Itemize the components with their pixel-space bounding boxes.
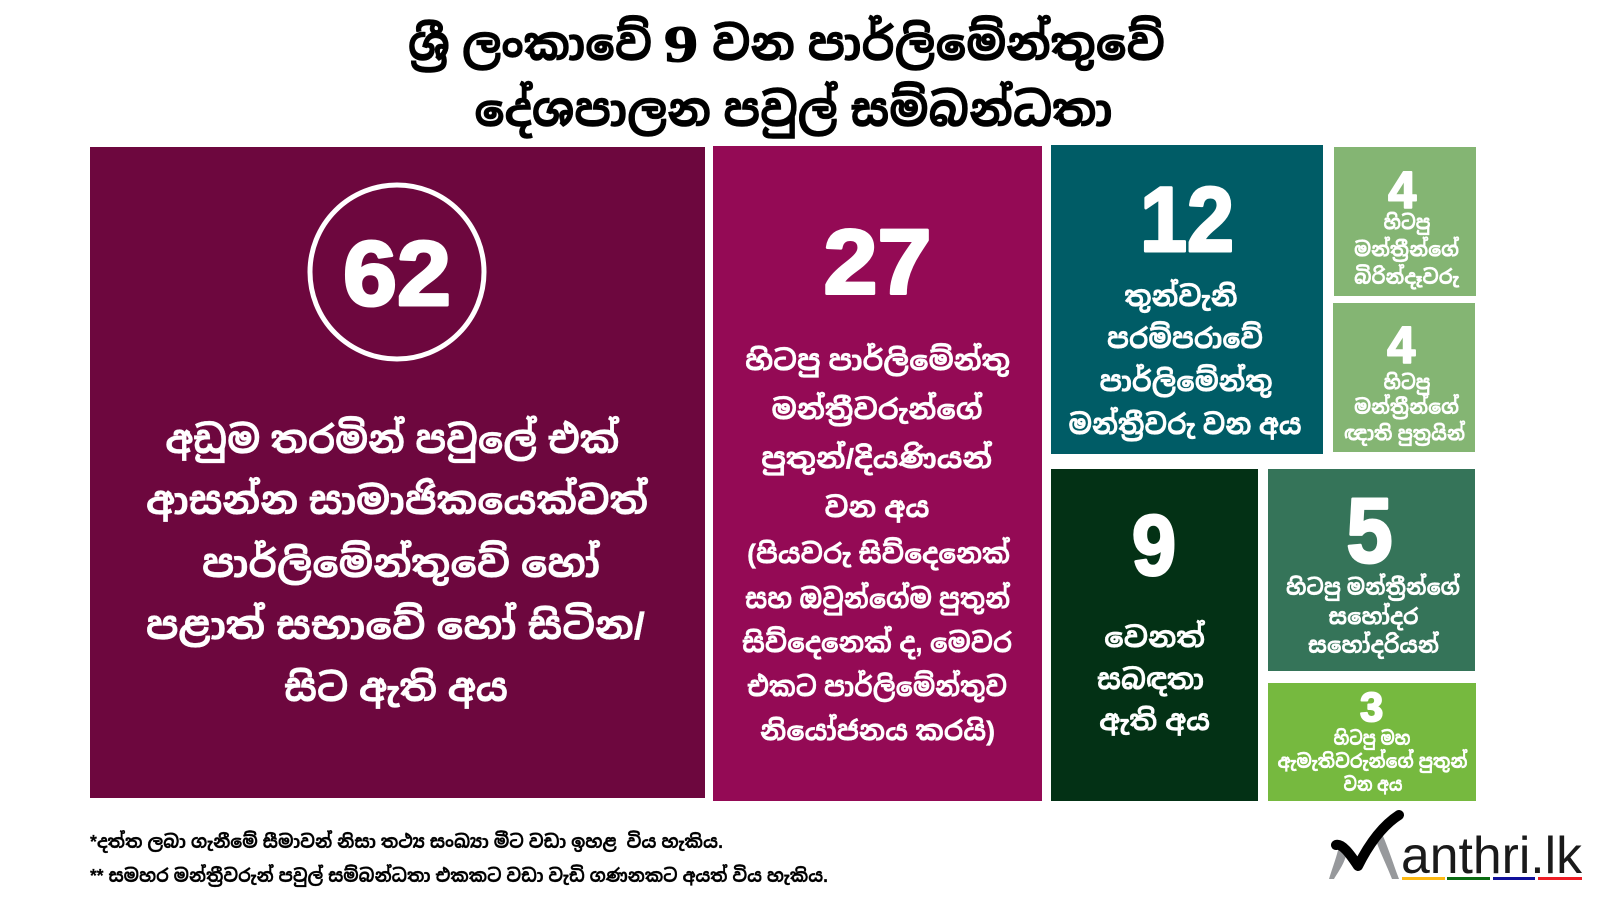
number: 62: 62 (343, 223, 451, 325)
title: වන පාර්ලිමේන්තුවේ (712, 14, 1165, 71)
text block: nephews description: ඥාති පුත්‍රයින් (1344, 420, 1466, 446)
panel: 4 wives of former ministers (1334, 147, 1476, 296)
text block: nephews description (1344, 372, 1466, 446)
text block: wives description (1354, 212, 1460, 289)
text block: 12 description: පාර්ලිමේන්තු (1100, 363, 1272, 398)
title: 9 (664, 16, 698, 74)
number: 5: 5 (1346, 480, 1392, 582)
logo: Manthri.lk: anthri.lk (1401, 827, 1583, 885)
icon: circle around 62 (310, 185, 484, 359)
text block: other relations description: වෙනත් (1104, 619, 1205, 653)
text block: other relations description: සබඳතා (1097, 664, 1204, 697)
text block: 27 description: හිටපු පාර්ලිමේන්තු (745, 342, 1010, 378)
panel: 5 siblings of former ministers (1268, 469, 1475, 671)
text block: nephews description: හිටපු (1384, 372, 1430, 394)
text block: wives description: හිටපු (1384, 212, 1430, 234)
number: 4: 4 (1388, 162, 1416, 220)
text block: 62 description (146, 415, 648, 710)
number: 3: 3 (1360, 684, 1383, 730)
text block: 12 description (1068, 278, 1302, 442)
number: 4: 4 (1387, 317, 1415, 375)
text block: siblings description: සහෝදරියන් (1308, 631, 1440, 659)
text block: other relations description (1097, 619, 1210, 736)
text block: 27 description: මන්ත්‍රීවරුන්ගේ (772, 391, 983, 427)
panel: 4 nephews of former ministers (1333, 303, 1475, 452)
title: දේශපාලන පවුල් සම්බන්ධතා (474, 80, 1112, 138)
panel: 9 other relations (1051, 469, 1258, 801)
number: 27: 27 (824, 212, 932, 314)
text block: 62 description: පාර්ලිමේන්තුවේ හෝ (202, 539, 601, 586)
text block: siblings description: සහෝදර (1328, 602, 1419, 630)
panel: 12 third generation MPs (1051, 145, 1323, 454)
text block: sons description: ඇමැතිවරුන්ගේ පුතුන් (1278, 748, 1468, 773)
number: 9: 9 (1132, 498, 1176, 594)
title: ශ්‍රී ලංකාවේ (408, 14, 652, 72)
text block: 62 description: ආසන්න සාමාජිකයෙක්වත් (146, 476, 648, 523)
text block: 27 description: පුතුන්/දියණියන් (761, 440, 993, 476)
text block: 62 description: අඩුම තරමින් පවුලේ එක් (165, 415, 619, 463)
text block: nephews description: මන්ත්‍රීන්ගේ (1354, 394, 1460, 419)
text block: other relations description: ඇති අය (1099, 705, 1210, 736)
panel: 3 sons of former prime ministers (1268, 683, 1476, 801)
text block: sons description: වන අය (1344, 774, 1402, 796)
footnotes (90, 829, 828, 887)
text block: siblings description (1286, 573, 1461, 659)
text block: wives description: මන්ත්‍රීන්ගේ (1354, 236, 1460, 262)
text block: 62 description: පළාත් සභාවේ හෝ සිටින/ (146, 601, 645, 648)
text block: 27 description: එකට පාර්ලිමේන්තුව (747, 669, 1007, 702)
title (408, 14, 1165, 138)
logo: Manthri.lk (1329, 815, 1583, 885)
footnotes: ** සමහර මන්ත්‍රීවරුන් පවුල් සම්බන්ධතා එකකට වඩා වැඩි ගණනකට අයත් විය හැකිය. (90, 863, 828, 887)
text block: 12 description: තුන්වැනි (1124, 278, 1238, 312)
text block: 12 description: මන්ත්‍රීවරු වන අය (1068, 406, 1302, 442)
text block: 27 description: සහ ඔවුන්ගේම පුතුන් (745, 581, 1011, 615)
text block: 27 description: වන අය (824, 492, 930, 523)
text block: 12 description: පරම්පරාවේ (1107, 320, 1263, 354)
footnotes: *දත්ත ලබා ගැනීමේ සීමාවන් නිසා තථ්‍ය සංඛ්‍යා මීට වඩා ඉහළ විය හැකිය. (90, 829, 723, 853)
text block: sons description (1278, 728, 1468, 796)
text block: 62 description: සිට ඇති අය (284, 667, 508, 710)
text block: siblings description: හිටපු මන්ත්‍රීන්ගේ (1286, 573, 1461, 601)
text block: 27 description: (පියවරු සිව්දෙනෙක් (747, 536, 1011, 570)
text block: wives description: බිරින්දෑවරු (1354, 264, 1459, 289)
text block: 27 description (742, 342, 1012, 746)
panel: 27 children of former MPs (713, 146, 1042, 801)
panel: 62 family in parliament or provincial council (90, 147, 705, 798)
text block: sons description: හිටපු මහ (1334, 728, 1410, 750)
text block: 27 description: නියෝජනය කරයි) (760, 713, 995, 746)
text block: 27 description: සිව්දෙනෙක් ද, මෙවර (742, 625, 1012, 659)
number: 12: 12 (1140, 169, 1234, 271)
